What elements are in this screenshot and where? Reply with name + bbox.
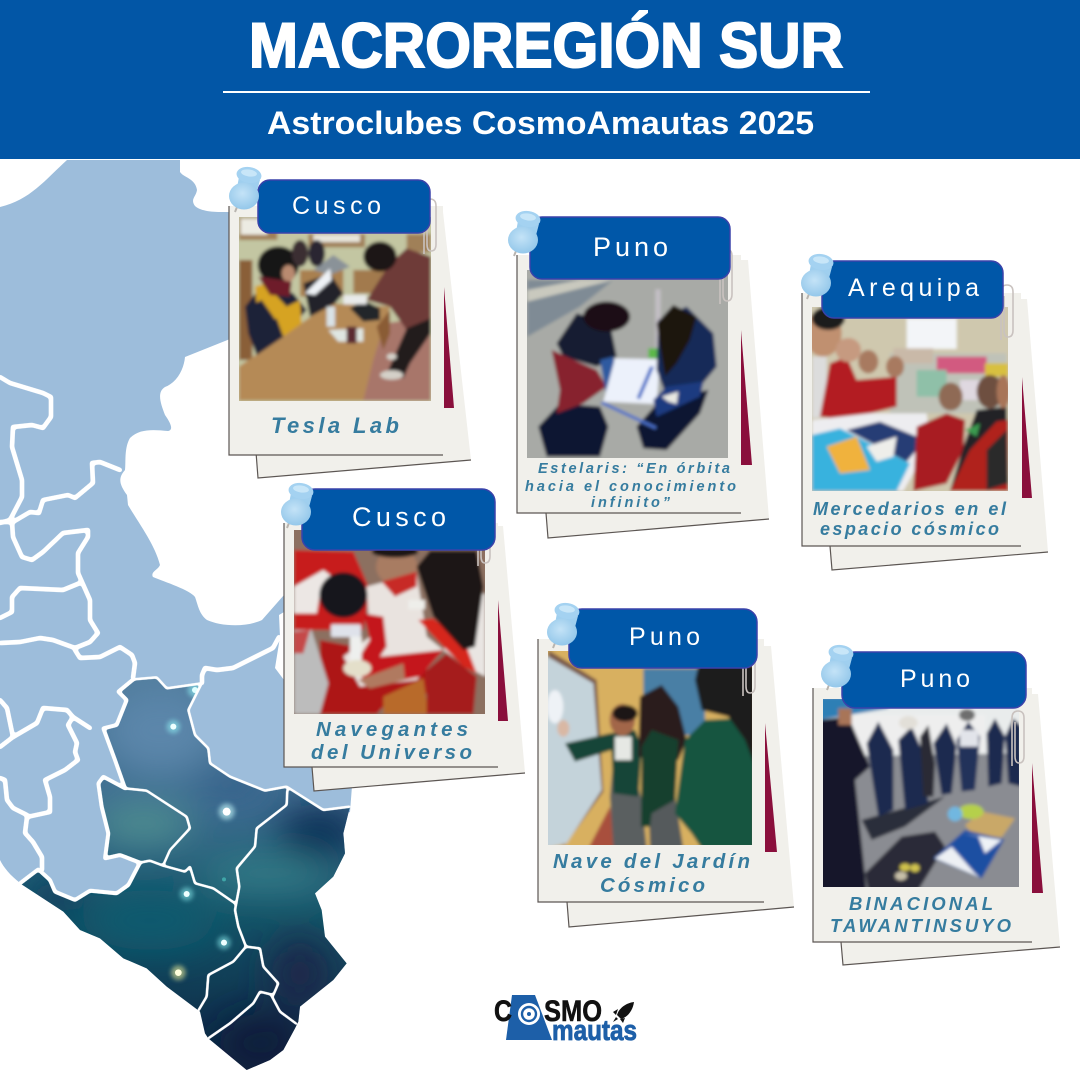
back card xyxy=(256,212,471,478)
title: MACROREGIÓN SUR xyxy=(249,11,843,81)
front card xyxy=(802,293,1021,546)
place label: Arequipa xyxy=(848,274,979,302)
pushpin xyxy=(508,209,541,256)
place label: Puno xyxy=(593,232,668,262)
pushpin xyxy=(821,643,854,690)
map: nebula region borders xyxy=(20,677,350,1038)
caption: BINACIONAL xyxy=(849,893,993,914)
place label xyxy=(530,217,730,279)
card: Nave del Jardín Cósmico, Puno xyxy=(538,601,794,927)
pushpin xyxy=(229,165,262,212)
caption: infinito” xyxy=(591,495,671,511)
place label: Cusco xyxy=(352,502,446,532)
place label: Puno xyxy=(900,665,970,693)
paperclip xyxy=(424,199,436,254)
map: region borders xyxy=(0,377,279,870)
back card xyxy=(567,646,794,927)
paperclip xyxy=(720,249,732,304)
card: Tesla Lab, Cusco xyxy=(229,165,471,478)
front card xyxy=(229,206,443,455)
logo: CosmoAmautas: mautas xyxy=(552,1015,637,1047)
caption: Mercedarios en el xyxy=(813,499,1007,519)
place label xyxy=(569,609,757,668)
front card xyxy=(517,255,741,513)
caption: Nave del Jardín xyxy=(553,850,750,873)
card: Mercedarios, Arequipa xyxy=(801,252,1048,570)
logo trapezoid and spiral xyxy=(506,995,552,1040)
back card xyxy=(830,299,1048,570)
caption xyxy=(553,850,750,897)
map: light blue regions xyxy=(0,160,352,902)
caption: del Universo xyxy=(311,741,472,764)
map: stars xyxy=(167,683,235,980)
place label xyxy=(258,180,430,233)
place label xyxy=(822,261,1003,318)
card: Navegantes del Universo, Cusco xyxy=(281,481,525,791)
caption: Cósmico xyxy=(600,874,705,897)
map: white coastal sliver xyxy=(275,612,284,680)
caption xyxy=(525,461,736,511)
front card xyxy=(284,523,498,767)
back card xyxy=(312,526,525,791)
photo: Estelaris xyxy=(527,270,728,458)
caption xyxy=(830,893,1012,936)
caption: espacio cósmico xyxy=(820,519,999,539)
front card xyxy=(538,639,764,902)
caption: Estelaris: “En órbita xyxy=(538,461,730,477)
card: Estelaris, Puno xyxy=(508,209,769,538)
place label: Puno xyxy=(629,623,700,651)
pushpin xyxy=(547,601,580,648)
photo: Binacional xyxy=(823,699,1019,887)
paperclip xyxy=(1001,285,1013,340)
icon: rocket xyxy=(613,1002,634,1023)
paperclip xyxy=(478,511,490,566)
paperclip xyxy=(743,641,755,696)
subtitle: Astroclubes CosmoAmautas 2025 xyxy=(267,105,814,141)
place label: Cusco xyxy=(292,192,381,220)
paperclip xyxy=(1012,711,1024,766)
caption: hacia el conocimiento xyxy=(525,479,736,495)
caption: Tesla Lab xyxy=(271,413,399,438)
pushpin xyxy=(281,481,314,528)
map: nebula filled southern regions xyxy=(18,676,350,1070)
map of Peru xyxy=(0,160,367,1080)
logo wordmark: C xyxy=(494,995,512,1028)
caption: TAWANTINSUYO xyxy=(830,915,1012,936)
place label xyxy=(842,652,1026,708)
back card xyxy=(841,694,1060,965)
caption: Navegantes xyxy=(316,718,468,741)
back card xyxy=(546,260,769,538)
caption xyxy=(311,718,472,764)
card: Binacional Tawantinsuyo, Puno xyxy=(813,643,1060,965)
photo: Tesla Lab xyxy=(239,217,431,401)
caption xyxy=(813,499,1007,539)
header band xyxy=(0,0,1080,159)
front card xyxy=(813,688,1032,942)
photo: Nave del Jardín xyxy=(548,651,752,845)
photo: Mercedarios xyxy=(812,307,1008,491)
photo: Navegantes xyxy=(294,530,485,714)
pushpin xyxy=(801,252,834,299)
logo: CosmoAmautas xyxy=(494,995,637,1047)
place label xyxy=(302,489,495,550)
logo: CosmoAmautas: SMO xyxy=(544,995,602,1028)
